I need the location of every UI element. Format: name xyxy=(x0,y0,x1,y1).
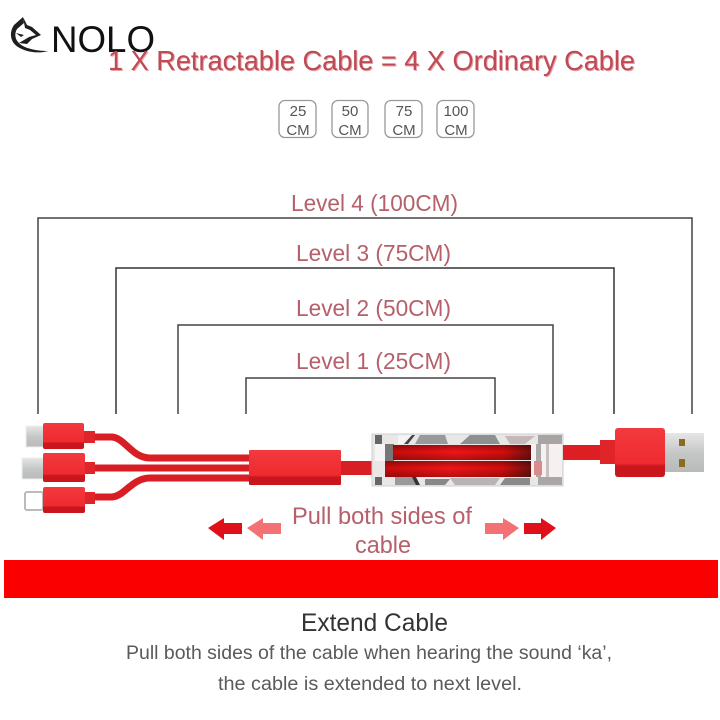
icon: fox head xyxy=(11,17,48,52)
case right chamber xyxy=(530,444,562,477)
level 2 bracket and label: Level 2 (50CM) xyxy=(296,295,451,321)
connector: USB-C xyxy=(22,453,95,482)
logo wordmark: NOLO xyxy=(51,19,155,60)
pull text xyxy=(292,503,472,559)
arrow: near left xyxy=(247,518,281,540)
badge 75 CM: CM xyxy=(392,122,416,139)
heading: Extend Cable: Extend Cable xyxy=(301,609,448,637)
badge 50 CM: 50 xyxy=(342,103,358,120)
red band xyxy=(4,560,718,598)
badge 75 CM: 75 xyxy=(396,103,412,120)
description text: Pull both sides of the cable when hearing the sound ‘ka’, xyxy=(126,643,612,664)
length badges xyxy=(279,100,474,139)
description text: the cable is extended to next level. xyxy=(218,674,522,695)
badge 25 CM: 25 xyxy=(290,103,306,120)
case top texture xyxy=(375,435,562,445)
badge 25 CM: CM xyxy=(286,122,310,139)
level 2 bracket and label xyxy=(178,295,553,414)
badge 100 CM xyxy=(437,100,474,139)
instruction: pull arrows and text xyxy=(208,503,556,559)
badge 75 CM xyxy=(385,100,422,139)
retractable cable xyxy=(22,423,704,513)
level 3 bracket and label xyxy=(116,240,614,414)
case bottom texture xyxy=(375,477,562,485)
connector: Lightning xyxy=(25,487,95,513)
wires to hub xyxy=(94,437,250,497)
description text xyxy=(126,643,612,695)
badge 50 CM xyxy=(332,100,368,139)
level 1 bracket and label xyxy=(246,348,495,414)
level 4 bracket and label xyxy=(38,190,692,414)
level 3 bracket and label: Level 3 (75CM) xyxy=(296,240,451,266)
logo: NOLO xyxy=(11,17,155,60)
badge 25 CM xyxy=(279,100,316,139)
pull text: Pull both sides of xyxy=(292,503,472,530)
badge 50 CM: CM xyxy=(338,122,362,139)
flat cable right xyxy=(563,445,601,460)
ribbon upper xyxy=(393,445,531,460)
arrow: far right xyxy=(524,518,556,540)
level 4 bracket and label: Level 4 (100CM) xyxy=(291,190,458,216)
case left chamber xyxy=(375,444,393,461)
ribbon lower xyxy=(385,461,531,477)
level 1 bracket and label: Level 1 (25CM) xyxy=(296,348,451,374)
USB-A plug xyxy=(615,428,704,477)
flat cable left xyxy=(341,461,386,475)
hub xyxy=(249,450,341,485)
badge 100 CM: 100 xyxy=(443,103,469,120)
arrow: far left xyxy=(208,518,242,540)
arrow: near right xyxy=(485,518,519,540)
badge 100 CM: CM xyxy=(444,122,468,139)
title: 1 X Retractable Cable = 4 X Ordinary Cable xyxy=(109,46,636,77)
transparent case xyxy=(372,434,563,486)
title: 1 X Retractable Cable = 4 X Ordinary Cable xyxy=(108,45,635,76)
connector: micro USB xyxy=(26,423,95,449)
pull text: cable xyxy=(355,532,411,559)
